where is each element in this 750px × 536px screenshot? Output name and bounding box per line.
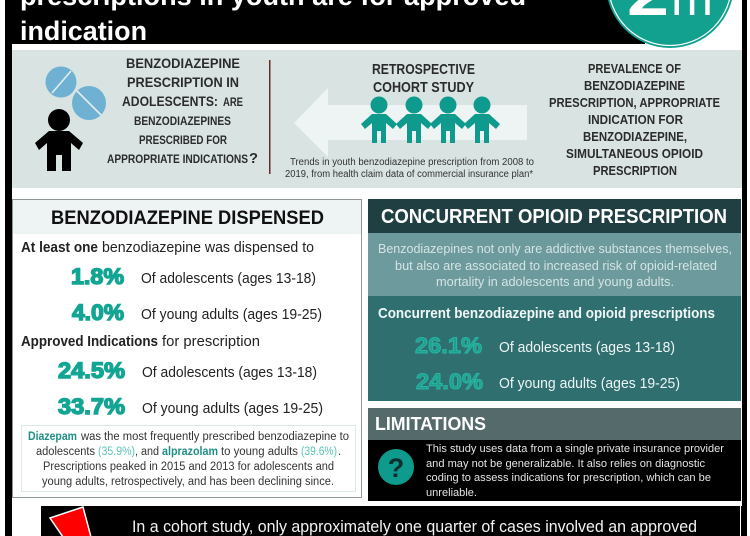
study outcomes: PRESCRIPTION, APPROPRIATE: [549, 96, 720, 110]
arrow: [294, 88, 527, 157]
icon: pills: [46, 66, 106, 120]
callout: most prescribed drugs: [22, 426, 356, 492]
concurrent prescription statistics: 24.0%: [416, 369, 483, 394]
approved indications statistics: [21, 333, 323, 419]
study question: BENZODIAZEPINES: [134, 114, 231, 128]
takeaway text: In a cohort study, only approximately one quarter of cases involved an approved: [132, 518, 697, 536]
callout: most prescribed drugs: , and: [135, 446, 159, 458]
dispensed statistics: Of young adults (ages 19-25): [141, 306, 322, 323]
study type heading: RETROSPECTIVE: [372, 61, 475, 78]
icon: question mark: ?: [388, 453, 404, 483]
study type heading: COHORT STUDY: [373, 79, 474, 96]
study description: 2019, from health claim data of commercial insurance plan*: [285, 169, 533, 180]
limitations text: unreliable.: [426, 487, 477, 499]
takeaway banner: [41, 506, 742, 536]
panel: concurrent opioid prescription: [368, 199, 741, 401]
heading: BENZODIAZEPINE DISPENSED: [51, 207, 324, 229]
study description: Trends in youth benzodiazepine prescription from 2008 to: [290, 157, 534, 168]
concurrent prescription statistics: [378, 305, 715, 394]
study question: BENZODIAZEPINE: [126, 56, 240, 71]
opioid risk text: Benzodiazepines not only are addictive substances themselves,: [378, 242, 732, 256]
callout: most prescribed drugs: young adults, retrospectively, and has been declining since.: [42, 476, 334, 488]
study question: ARE: [223, 97, 243, 109]
logo: 2 minute medicine: [606, 0, 734, 48]
study outcomes: PRESCRIPTION: [593, 164, 677, 178]
dispensed statistics: 4.0%: [72, 300, 124, 325]
icon: cohort of four people: [361, 96, 500, 143]
approved indications statistics: 33.7%: [58, 394, 125, 419]
opioid risk text: but also are associated to increased risk of opioid-related: [395, 259, 717, 273]
icon: question mark: [378, 449, 414, 485]
dispensed statistics: benzodiazepine was dispensed to: [102, 239, 314, 256]
study question: ?: [249, 150, 258, 167]
study outcomes: BENZODIAZEPINE: [584, 79, 685, 93]
study question: ADOLESCENTS:: [122, 94, 218, 109]
limitations text: This study uses data from a single private insurance provider: [426, 443, 724, 455]
study outcomes: [549, 62, 720, 178]
header banner: [5, 0, 645, 46]
concurrent prescription statistics: Of young adults (ages 19-25): [499, 375, 680, 392]
opioid risk text: mortality in adolescents and young adults.: [436, 275, 674, 289]
study question: [107, 56, 258, 167]
approved indications statistics: for prescription: [162, 333, 260, 350]
dispensed statistics: At least one: [21, 239, 98, 256]
approved indications statistics: 24.5%: [58, 358, 125, 383]
title: indication: [20, 16, 147, 46]
limitations text: and may not be generalizable. It also relies on diagnostic: [426, 458, 705, 470]
dispensed statistics: [21, 239, 322, 325]
callout: most prescribed drugs: (39.6%): [301, 446, 337, 458]
callout: most prescribed drugs: .: [338, 446, 341, 458]
icon: red warning shape: [50, 507, 91, 536]
study question: APPROPRIATE INDICATIONS: [107, 152, 248, 166]
callout: most prescribed drugs: (35.9%): [98, 446, 135, 458]
icon: adolescent: [35, 109, 83, 171]
heading: LIMITATIONS: [375, 413, 486, 434]
study question: PRESCRIPTION IN: [127, 75, 239, 90]
study outcomes: BENZODIAZEPINE,: [583, 130, 687, 144]
callout: most prescribed drugs: was the most frequently prescribed benzodiazepine to: [80, 431, 349, 443]
study outcomes: INDICATION FOR: [588, 113, 683, 127]
panel: limitations: [368, 408, 741, 501]
approved indications statistics: Of adolescents (ages 13-18): [142, 364, 317, 381]
concurrent prescription statistics: Of adolescents (ages 13-18): [499, 339, 675, 356]
dispensed statistics: 1.8%: [71, 264, 124, 289]
study outcomes: PREVALENCE OF: [588, 62, 681, 76]
heading: CONCURRENT OPIOID PRESCRIPTION: [381, 206, 727, 228]
study question: PRESCRIBED FOR: [139, 133, 227, 147]
approved indications statistics: Approved Indications: [21, 333, 158, 350]
callout: most prescribed drugs: Prescriptions peaked in 2015 and 2013 for adolescents and: [43, 461, 334, 473]
limitations text: coding to assess indications for prescription, which can be: [426, 472, 711, 484]
concurrent prescription statistics: Concurrent benzodiazepine and opioid prescriptions: [378, 305, 715, 322]
panel: study overview: [12, 50, 742, 188]
panel: benzodiazepine dispensed: [12, 200, 362, 498]
limitations text: [426, 443, 724, 499]
title: [20, 0, 526, 46]
study type heading: [372, 61, 475, 96]
callout: most prescribed drugs: Diazepam: [28, 431, 77, 443]
study outcomes: SIMULTANEOUS OPIOID: [566, 147, 703, 161]
callout: most prescribed drugs: alprazolam: [162, 446, 218, 458]
concurrent prescription statistics: 26.1%: [415, 333, 482, 358]
callout: most prescribed drugs: to young adults: [221, 446, 298, 458]
dispensed statistics: Of adolescents (ages 13-18): [141, 270, 316, 287]
opioid risk text: [378, 242, 732, 289]
approved indications statistics: Of young adults (ages 19-25): [142, 400, 323, 417]
callout: most prescribed drugs: adolescents: [36, 446, 95, 458]
study description: [285, 157, 534, 180]
